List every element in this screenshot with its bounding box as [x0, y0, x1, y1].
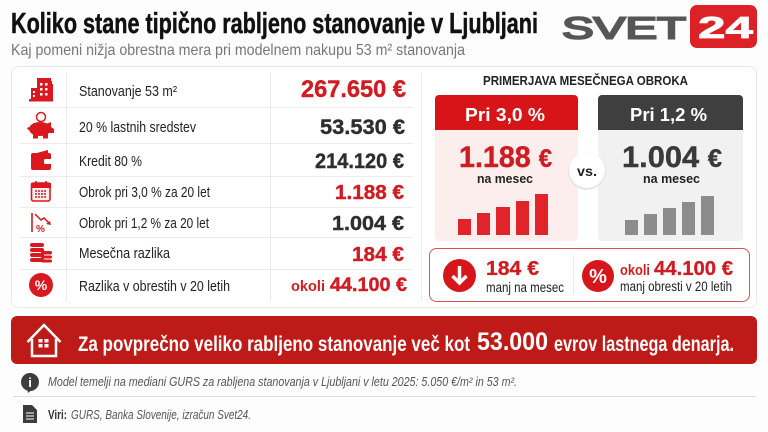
- text: own funds label: 20 % lastnih sredstev: [79, 120, 197, 136]
- title: Koliko stane tipično rabljeno stanovanje v Ljubljani: [11, 8, 538, 40]
- card: rate 1.2: Pri 1,2 %: [630, 105, 707, 125]
- icon: calendar: [31, 181, 51, 201]
- callout: savings: manj na mesec: [486, 280, 564, 295]
- bar chart: gray: [625, 196, 714, 235]
- icon: piggy bank: [27, 112, 54, 138]
- value: loan: 214.120 €: [315, 150, 404, 173]
- text: monthly difference label: Mesečna razlika: [79, 246, 171, 262]
- bar chart: red: [458, 194, 548, 235]
- panel: cost table: [20, 72, 422, 302]
- icon: falling percent: [32, 213, 51, 235]
- banner: key message: [11, 316, 757, 364]
- card: rate 3.0: 1.188 €: [459, 141, 552, 174]
- icon: percent badge: %: [35, 277, 48, 293]
- icon: info: i: [28, 375, 32, 390]
- card: rate 1.2: 1.004 €: [622, 141, 722, 174]
- card: rate 1.2: na mesec: [643, 171, 700, 186]
- callout: savings: 44.100 €: [654, 258, 733, 280]
- callout: savings: 184 €: [486, 258, 539, 280]
- text: apartment label: Stanovanje 53 m²: [79, 84, 177, 100]
- panel: main card: [12, 66, 756, 308]
- callout: savings: [430, 248, 750, 302]
- icon: down arrow: [443, 259, 476, 292]
- icon: wallet: [31, 150, 52, 170]
- card: rate 1.2: [598, 95, 743, 241]
- card: rate 3.0: Pri 3,0 %: [465, 105, 545, 125]
- text: loan label: Kredit 80 %: [79, 154, 142, 170]
- value: payment at 3.0: 1.188 €: [335, 182, 404, 204]
- text: payment at 1.2 label: Obrok pri 1,2 % za 20 let: [79, 216, 209, 232]
- icon: house: [28, 325, 60, 356]
- value: own funds: 53.530 €: [320, 116, 405, 139]
- text: interest difference label: Razlika v obrestih v 20 letih: [79, 279, 230, 295]
- subtitle: Kaj pomeni nižja obrestna mera pri modelnem nakupu 53 m² stanovanja: [11, 42, 465, 59]
- logo: Svet24: [562, 5, 757, 48]
- icon: buildings: [29, 78, 53, 102]
- heading: comparison: PRIMERJAVA MESEČNEGA OBROKA: [483, 73, 688, 88]
- icon: info: [21, 373, 39, 393]
- banner: key message: 53.000: [477, 328, 548, 356]
- logo: Svet24: SVET: [562, 10, 686, 46]
- value: payment at 1.2: 1.004 €: [332, 213, 404, 235]
- badge: vs: [568, 152, 606, 190]
- value: interest difference: 44.100 €: [330, 275, 407, 296]
- icon: coins: [30, 243, 52, 262]
- value: interest difference: [291, 275, 407, 296]
- panel: monthly payment comparison: [430, 73, 750, 302]
- badge: vs: vs.: [577, 163, 597, 179]
- icon: percent: %: [589, 266, 607, 288]
- icon: document: [23, 405, 37, 423]
- banner: key message: Za povprečno veliko rabljeno stanovanje več kot: [78, 333, 470, 356]
- callout: savings: okoli: [620, 263, 650, 279]
- value: monthly difference: 184 €: [352, 244, 404, 266]
- icon: percent: [582, 260, 614, 292]
- icon: falling percent: %: [36, 224, 45, 235]
- card: rate 3.0: na mesec: [477, 171, 533, 186]
- icon: percent badge: [29, 273, 53, 297]
- value: apartment price: 267.650 €: [301, 76, 406, 103]
- note: model: Model temelji na mediani GURS za rabljena stanovanja v Ljubljani v letu 2025: 5.050 €/m² in 53 m².: [48, 375, 517, 389]
- sources: Viri:: [48, 408, 67, 422]
- card: rate 3.0: [435, 95, 578, 241]
- text: payment at 3.0 label: Obrok pri 3,0 % za 20 let: [79, 185, 210, 201]
- callout: savings: manj obresti v 20 letih: [620, 279, 732, 294]
- sources: GURS, Banka Slovenije, izračun Svet24.: [71, 408, 251, 422]
- value: interest difference: okoli: [291, 279, 325, 295]
- logo: Svet24: 24: [698, 10, 754, 45]
